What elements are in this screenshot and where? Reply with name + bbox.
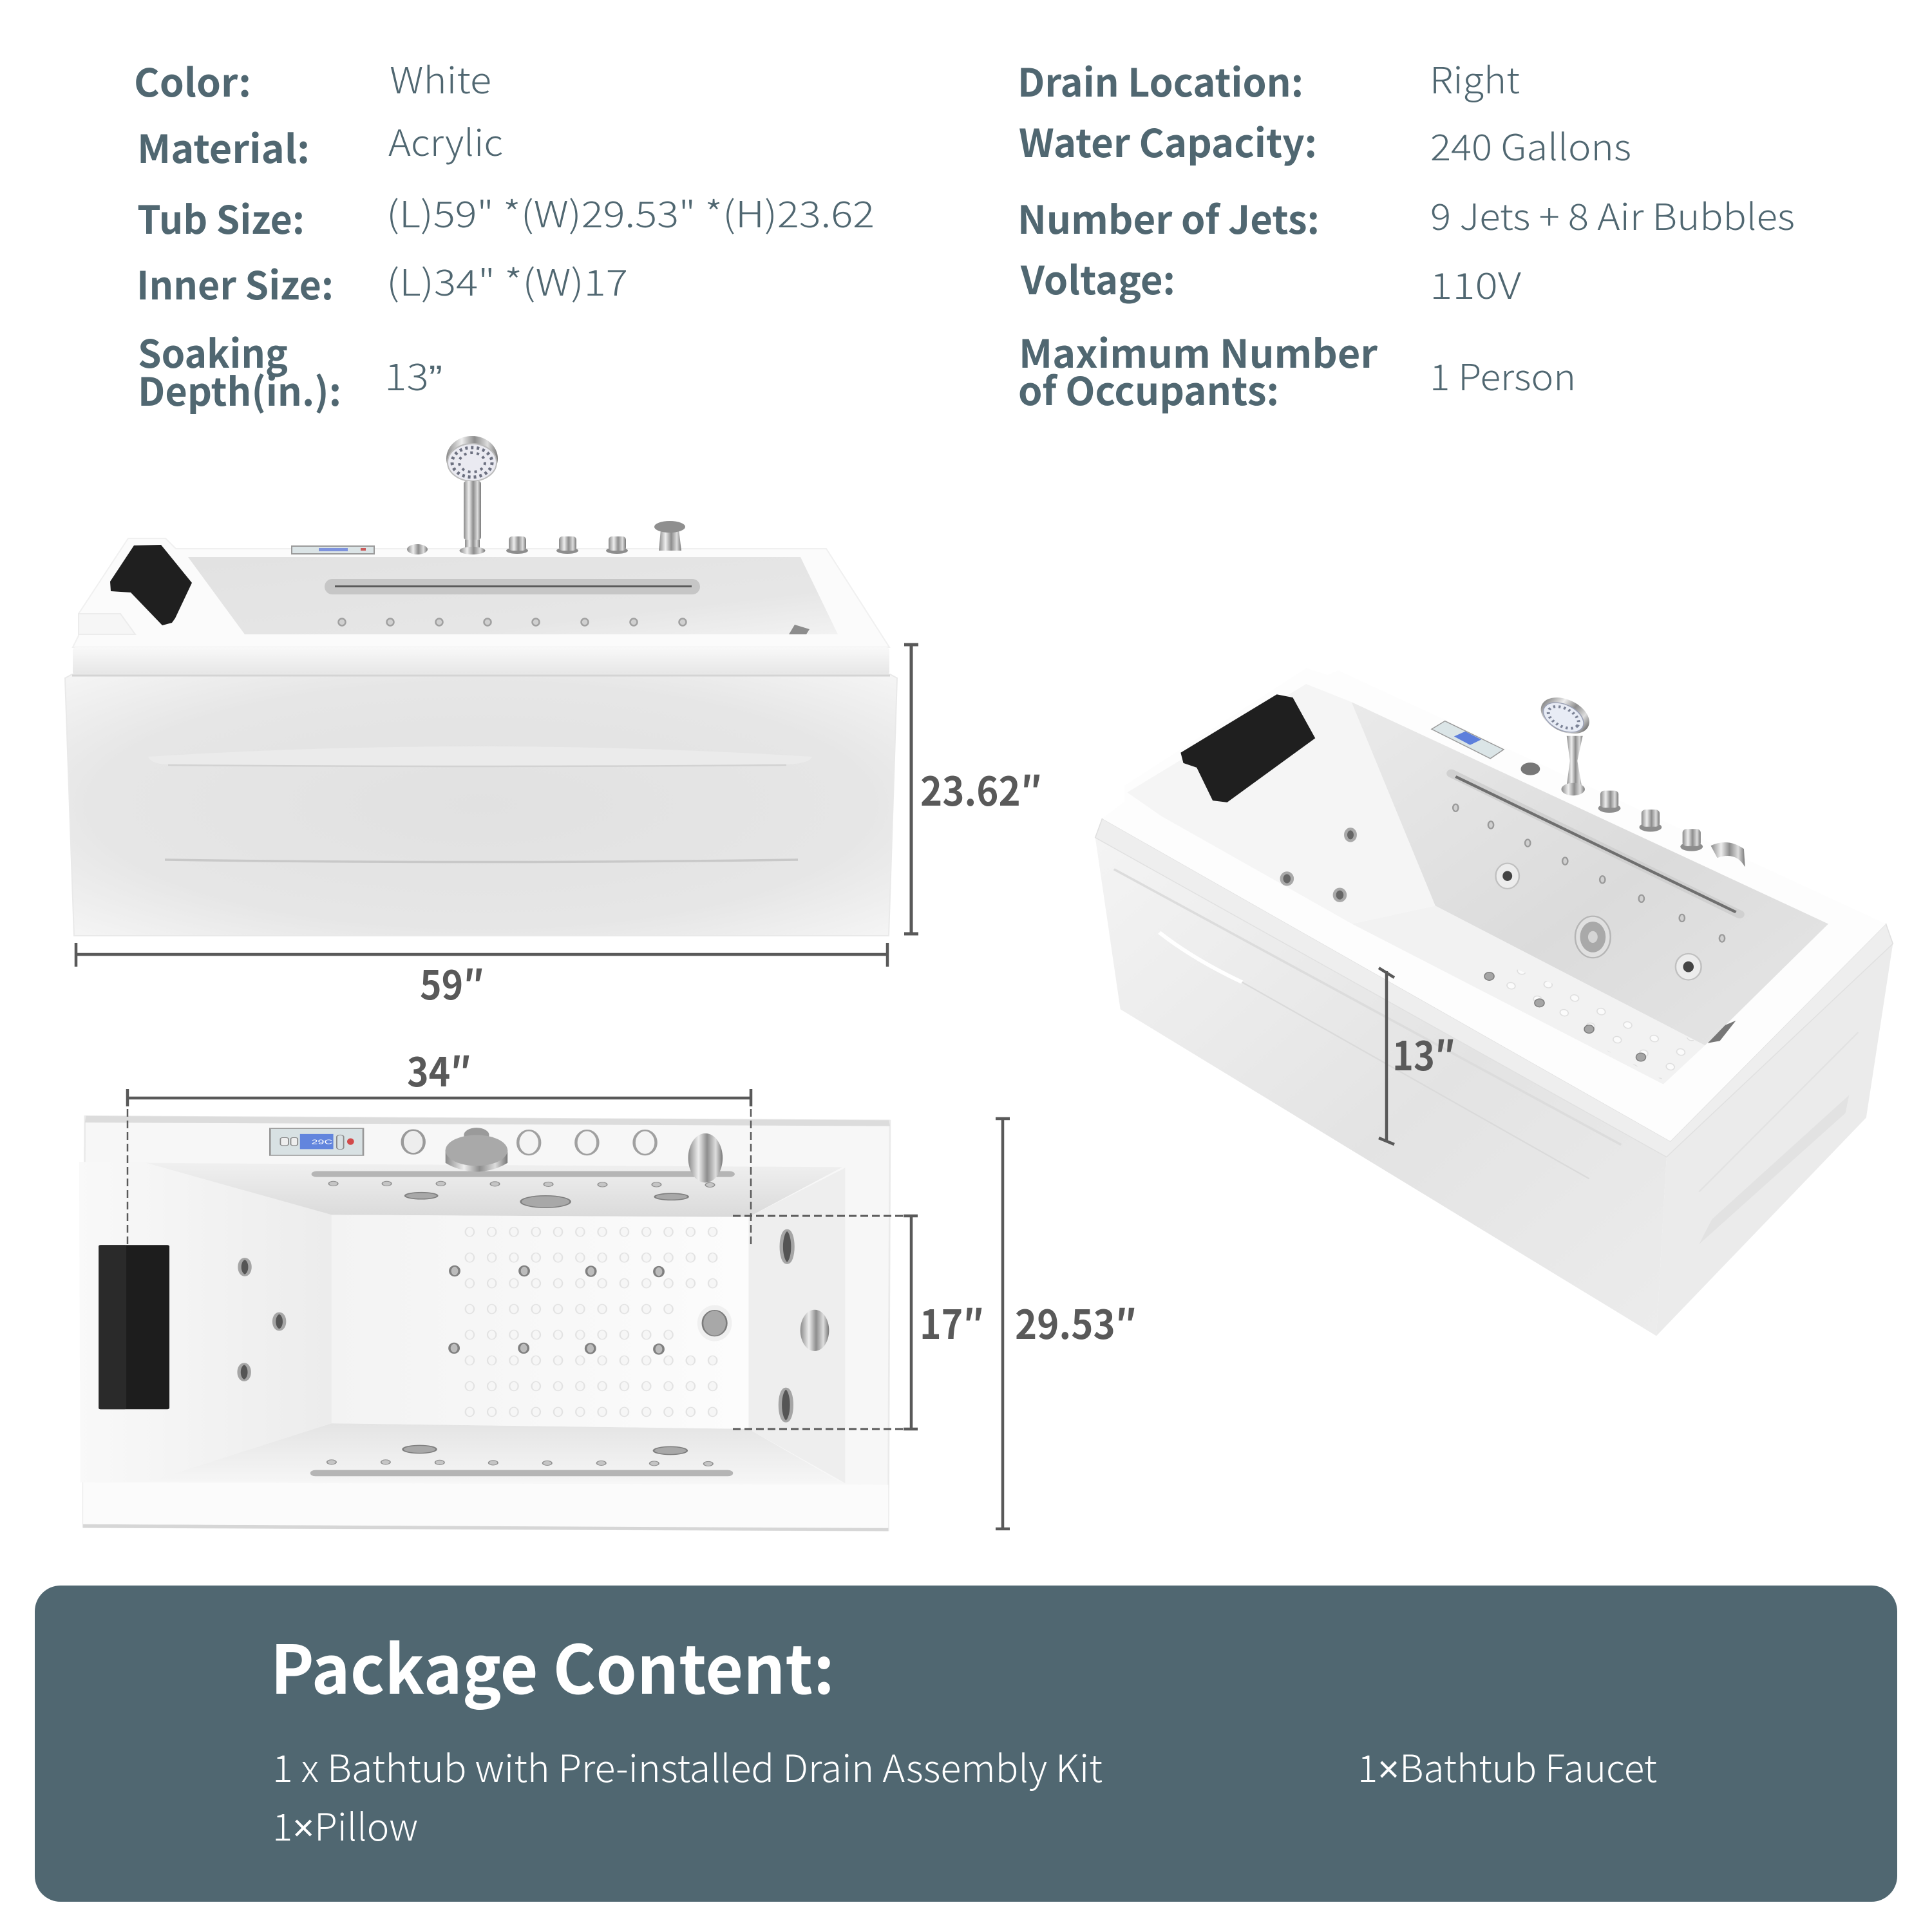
near wall	[149, 1423, 842, 1483]
label: Maximum Number line 2: of Occupants:	[1018, 361, 1279, 417]
front face	[1095, 838, 1667, 1336]
pillow	[1180, 694, 1315, 802]
dimension label: 29.53: 29.53″	[1015, 1293, 1137, 1350]
item: bathtub: 1 x Bathtub with Pre-installed Drain Assembly Kit	[272, 1739, 1103, 1793]
drain fitting	[1708, 1021, 1736, 1043]
value: Right: Right	[1430, 52, 1520, 104]
far edge band	[85, 1116, 890, 1126]
control display	[292, 546, 374, 554]
panel background	[35, 1586, 1897, 1902]
label: Number of Jets: Number of Jets:	[1018, 189, 1320, 245]
label: Drain Location: Drain Location:	[1018, 52, 1303, 108]
near deck	[83, 1482, 888, 1528]
dimension: inner length 34 inches	[128, 1089, 751, 1245]
control display: 29C	[312, 1139, 332, 1146]
dimension label: 34: 34″	[407, 1040, 471, 1098]
top view of bathtub	[79, 1116, 890, 1531]
headrest and end jets	[239, 1230, 793, 1421]
head slope	[1127, 684, 1435, 924]
small wall jets	[327, 1181, 715, 1466]
wall jets	[339, 618, 687, 626]
rim front	[73, 647, 889, 675]
front view of bathtub	[65, 436, 897, 936]
tub interior	[188, 557, 838, 634]
label: Maximum Number line 1: Maximum Number	[1019, 323, 1378, 379]
value: White: White	[390, 52, 491, 104]
overflow bar	[325, 579, 700, 594]
dimension: width 59 inches	[76, 943, 887, 967]
large jets	[1495, 864, 1701, 980]
outer rim	[83, 1116, 890, 1531]
drain fitting	[789, 625, 810, 634]
label: Inner Size: Inner Size:	[137, 255, 334, 311]
pillow	[110, 545, 192, 625]
spout	[654, 521, 685, 551]
headrest step	[79, 614, 135, 634]
dimension label: 13: 13″	[1392, 1024, 1455, 1082]
far wall	[146, 1163, 842, 1217]
control knobs	[407, 536, 628, 554]
drain	[697, 1305, 732, 1341]
label: Tub Size: Tub Size:	[137, 189, 305, 245]
floor	[1352, 906, 1705, 1084]
control knobs	[1520, 762, 1703, 851]
control display	[270, 1128, 363, 1155]
dimension: height 23.62 inches	[904, 645, 918, 934]
hand shower cradle	[446, 1128, 507, 1172]
control knobs	[402, 1130, 656, 1155]
dimension: width 29.53 inches	[996, 1119, 1010, 1529]
floor bubble jets	[1484, 972, 1645, 1061]
label: Water Capacity: Water Capacity:	[1019, 113, 1317, 169]
specification table: left column	[134, 52, 875, 417]
panel: package content	[35, 1586, 1897, 1902]
left jets	[1282, 829, 1355, 901]
item: pillow: 1×Pillow	[272, 1797, 418, 1852]
end face	[1656, 943, 1893, 1336]
label: Soaking Depth line 1: Soaking	[138, 323, 288, 379]
value: soaking depth: 13”	[384, 349, 442, 401]
dimension label: 17: 17″	[920, 1293, 984, 1350]
floor air dots	[459, 1219, 724, 1425]
spout	[688, 1133, 723, 1182]
item: faucet: 1×Bathtub Faucet	[1358, 1739, 1657, 1793]
dimension: inner width 17 inches	[733, 1216, 918, 1429]
floor air dots	[1485, 964, 1707, 1079]
front panel	[65, 674, 897, 936]
right wall	[748, 1168, 845, 1483]
control display	[1432, 721, 1504, 759]
value: tub size: (L)59" *(W)29.53" *(H)23.62	[386, 186, 875, 238]
heading: Package Content:	[270, 1616, 835, 1713]
spout	[1711, 842, 1745, 867]
panel mouldings	[72, 676, 890, 862]
dimension label: 59: 59″	[420, 953, 484, 1011]
overflow	[800, 1310, 829, 1351]
dimension: depth 13 inches	[1379, 968, 1394, 1144]
deck	[1103, 668, 1886, 1141]
near edge band	[83, 1524, 888, 1531]
wall jets	[1453, 804, 1725, 942]
panel mouldings	[1114, 869, 1858, 1244]
perspective view of bathtub	[1095, 668, 1893, 1336]
label: Soaking Depth line 2: Depth(in.):	[138, 361, 341, 417]
label: Color: Color:	[134, 52, 251, 108]
value: jets: 9 Jets + 8 Air Bubbles	[1430, 189, 1795, 241]
label: Voltage: Voltage:	[1020, 250, 1175, 306]
hand shower	[1533, 690, 1597, 795]
tub deck	[73, 538, 889, 647]
value: inner size: (L)34" *(W)17	[386, 254, 628, 307]
specification table: right column	[1018, 52, 1795, 417]
hand shower	[446, 436, 498, 554]
value: Acrylic: Acrylic	[388, 115, 503, 167]
value: 1 Person: 1 Person	[1430, 349, 1576, 401]
overflow bars	[310, 1171, 735, 1476]
overflow bar	[1452, 773, 1739, 914]
headrest slope	[79, 1162, 332, 1482]
value: 110V: 110V	[1430, 258, 1521, 310]
floor bubble jets	[450, 1266, 663, 1354]
value: 240 Gallons: 240 Gallons	[1430, 119, 1631, 171]
rim side	[1095, 819, 1893, 1157]
label: Material: Material:	[137, 118, 310, 175]
dimension label: 23.62: 23.62″	[920, 759, 1042, 817]
wide wall jets	[403, 1193, 688, 1455]
back wall	[1352, 702, 1828, 1045]
floor	[332, 1215, 748, 1429]
pillow	[99, 1245, 169, 1409]
